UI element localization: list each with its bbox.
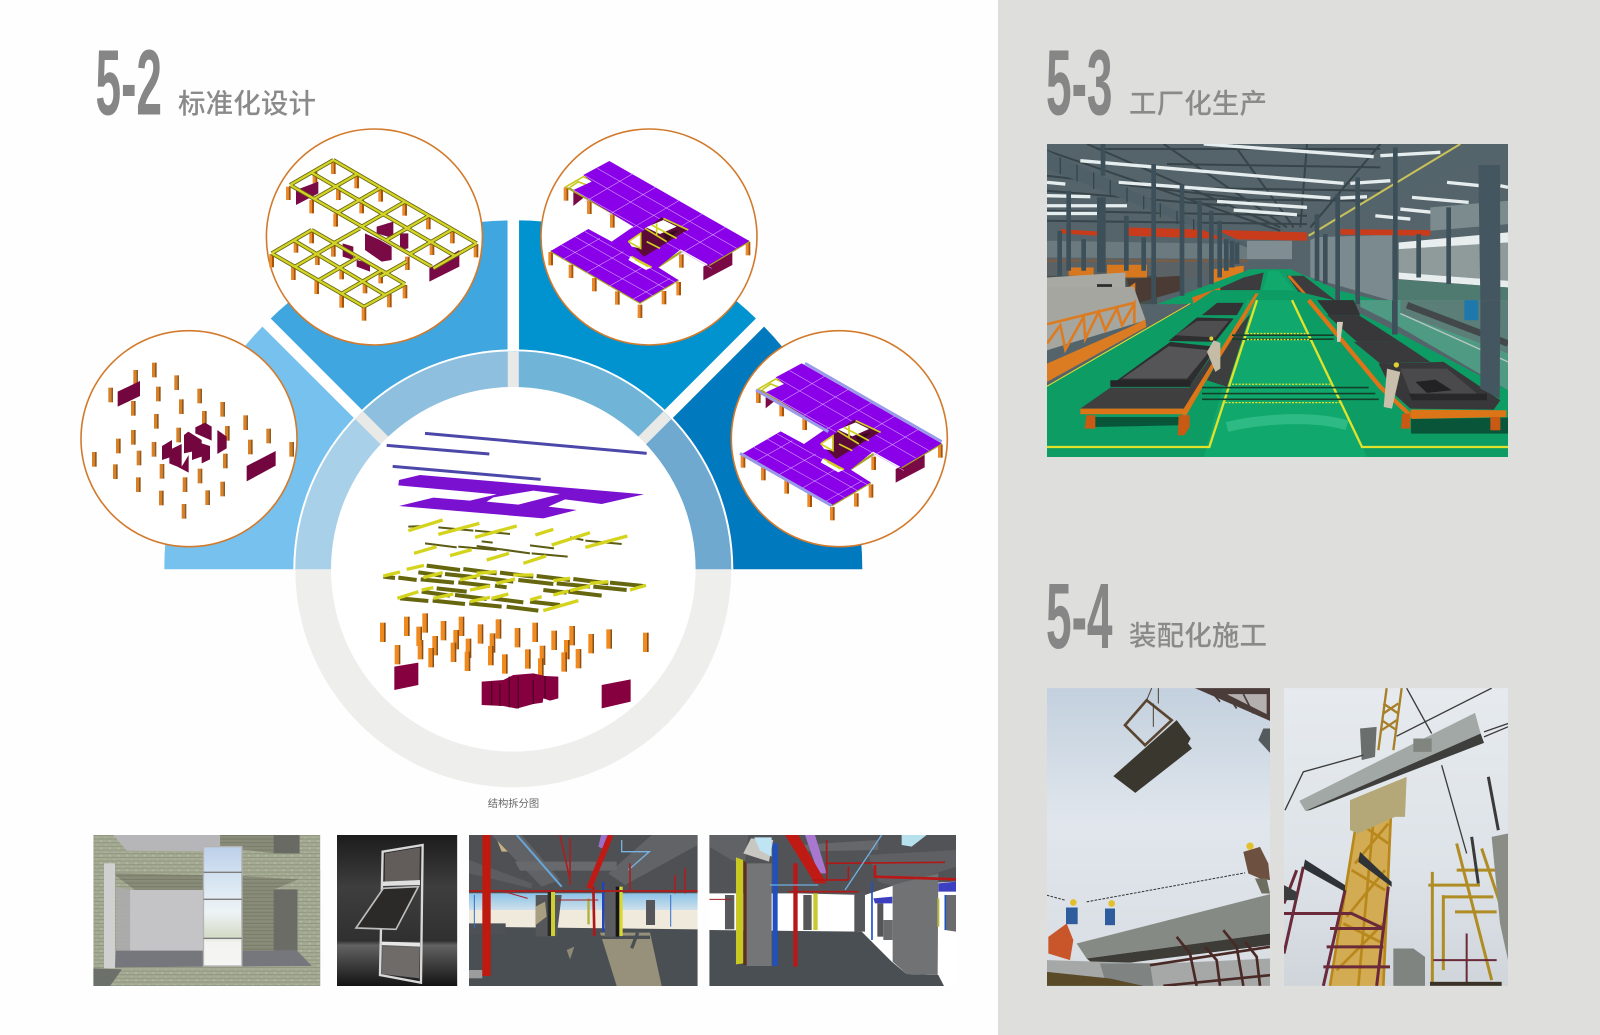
roof grid <box>1047 144 1454 231</box>
truss right <box>1309 144 1508 241</box>
heading: 5-4 assembly construction: 5-4 <box>1046 564 1113 668</box>
columns <box>1480 300 1500 399</box>
primary beams <box>383 566 643 611</box>
caption: structure breakdown: 结构拆分图 <box>488 797 539 810</box>
left table front <box>1080 388 1190 409</box>
frame model with beams <box>269 160 478 321</box>
factory floor and casting tables <box>1047 287 1508 457</box>
floor markings <box>1047 300 1508 447</box>
precast beam <box>1299 713 1481 811</box>
maroon shear walls <box>394 663 631 709</box>
far floor <box>1157 269 1394 304</box>
skylight strips <box>1047 144 1508 219</box>
photo: lifting precast panel <box>1047 688 1270 986</box>
orange columns <box>380 613 649 678</box>
ring: right segment <box>513 415 731 569</box>
background: right panel <box>998 0 1600 1035</box>
sector: lower right <box>513 322 862 569</box>
photo: balcony window render <box>93 835 320 986</box>
roof strips <box>387 433 647 479</box>
heading: 5-3 factory production <box>1046 31 1267 135</box>
secondary beams <box>408 526 622 557</box>
circle: roof strips added <box>731 331 947 547</box>
columns <box>1060 144 1449 304</box>
sector: upper right <box>513 220 760 569</box>
heading: 5-2 standardised design: 标准化设计 <box>178 88 316 119</box>
factory hall background <box>1047 144 1508 304</box>
right tables <box>1327 315 1400 342</box>
truss left <box>1047 151 1247 247</box>
red crane <box>1127 227 1307 241</box>
heading: 5-2 standardised design: 5-2 <box>96 31 162 135</box>
heading: 5-4 assembly construction: 装配化施工 <box>1129 620 1267 651</box>
photo: MEP interior render one <box>469 835 698 986</box>
ring: white centre <box>331 387 696 752</box>
background: left page <box>0 0 998 1035</box>
exploded structure model <box>380 433 649 709</box>
columns and shear walls model <box>92 363 294 519</box>
circle: slabs added <box>541 129 757 345</box>
heading: 5-3 factory production: 工厂化生产 <box>1129 88 1267 119</box>
ring: grey lower band <box>295 351 731 787</box>
sector: upper left <box>266 220 513 569</box>
safety line <box>1047 873 1245 902</box>
full model with blue strips <box>740 363 943 520</box>
sector: lower left <box>164 322 513 569</box>
orange racks <box>1069 267 1094 276</box>
workers <box>1207 340 1220 372</box>
scaffold and props <box>1284 867 1390 986</box>
purple floor slabs <box>398 475 644 518</box>
lower structure <box>1047 958 1270 986</box>
photo: lifting precast beam at tower crane <box>1284 688 1508 986</box>
tower crane <box>1378 688 1402 750</box>
heading: 5-2 standardised design <box>96 31 316 135</box>
heading: 5-3 factory production: 5-3 <box>1046 31 1113 135</box>
ring: upper right segment <box>513 351 668 569</box>
photo: MEP interior render two <box>709 835 956 986</box>
far tables <box>1194 272 1264 304</box>
fan diagram with central ring <box>164 215 862 787</box>
circle: beams added <box>266 129 482 345</box>
frame model with purple slabs <box>548 161 750 318</box>
concrete wall panels <box>1047 272 1125 304</box>
circle: columns and walls <box>81 331 297 547</box>
ring: left segment <box>295 415 513 569</box>
heading: 5-4 assembly construction <box>1046 564 1267 668</box>
trestle <box>1047 320 1146 382</box>
left tables receding <box>1169 318 1234 342</box>
ring: upper left segment <box>359 351 513 569</box>
photo: window unit render <box>337 835 458 986</box>
photo: precast factory floor <box>1047 144 1508 457</box>
machinery fence <box>1360 300 1508 390</box>
